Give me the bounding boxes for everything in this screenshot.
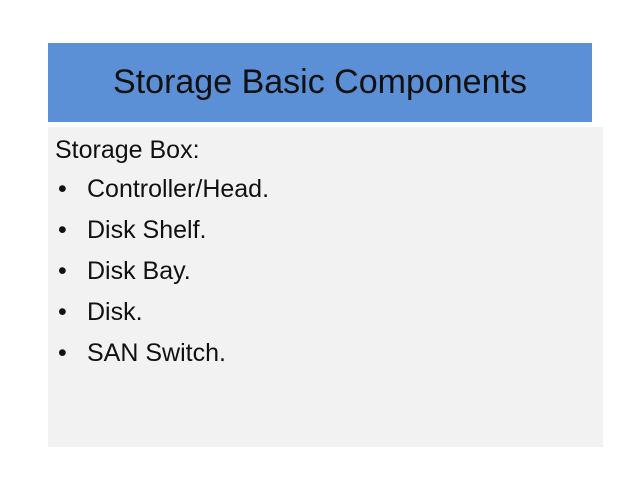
bullet list: •	[58, 298, 67, 326]
bullet list: Disk Bay.	[87, 257, 191, 285]
bullet list: •	[58, 175, 67, 203]
bullet list	[58, 175, 269, 367]
bullet list: SAN Switch.	[87, 339, 226, 367]
title: Storage Basic Components	[113, 63, 527, 101]
title	[48, 43, 592, 122]
heading: storage box: Storage Box:	[55, 136, 200, 164]
bullet list: •	[58, 257, 67, 285]
bullet list: Disk.	[87, 298, 143, 326]
panel: content	[48, 127, 603, 447]
bullet list: Controller/Head.	[87, 175, 269, 203]
bullet list: •	[58, 339, 67, 367]
bullet list: •	[58, 216, 67, 244]
bullet list: Disk Shelf.	[87, 216, 206, 244]
